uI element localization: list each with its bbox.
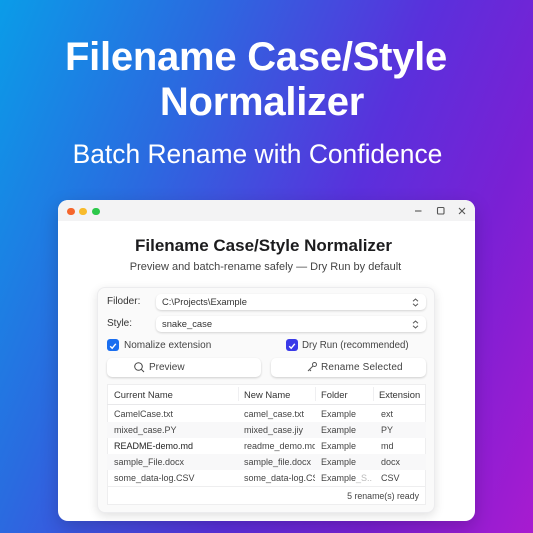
row 4: sample_file.docx — [244, 457, 311, 467]
row 1: CamelCase.txt — [114, 409, 173, 419]
title: Filename Case/Style — [65, 35, 447, 79]
window subheading: Preview and batch-rename safely — Dry Run by default — [130, 261, 401, 273]
button: preview — [107, 358, 261, 377]
row 2: mixed_case.PY — [114, 425, 177, 435]
label: dry run: Dry Run (recommended) — [302, 340, 409, 351]
row 1: Example — [321, 409, 356, 419]
row 3 — [114, 441, 394, 452]
row 4: docx — [381, 457, 400, 467]
title — [65, 35, 447, 124]
table header: Current Name — [114, 389, 173, 400]
row 4: sample_File.docx — [114, 457, 184, 467]
subtitle: Batch Rename with Confidence — [73, 139, 442, 169]
row 1 — [114, 409, 393, 420]
row 3: Example — [321, 441, 356, 451]
row 4 — [107, 454, 426, 470]
field: folder path: C:\Projects\Example — [162, 296, 247, 307]
row 2: PY — [381, 425, 393, 435]
table — [107, 384, 426, 505]
row 5 — [114, 473, 400, 484]
title bar — [58, 200, 475, 221]
row 1: camel_case.txt — [244, 409, 304, 419]
row 2: mixed_case.jiy — [244, 425, 303, 435]
panel: settings card — [97, 287, 435, 513]
icon: minimize dot — [79, 208, 86, 215]
field: folder path — [156, 294, 426, 310]
title: Normalizer — [160, 80, 364, 124]
row 5: CSV — [381, 473, 400, 483]
window heading: Filename Case/Style Normalizer — [135, 236, 392, 255]
row 1: ext — [381, 409, 393, 419]
icon: close dot — [67, 208, 74, 215]
rename label: Rename Selected — [321, 362, 403, 373]
table header — [107, 384, 426, 405]
app window — [58, 200, 475, 521]
checkbox: normalize extension — [107, 339, 119, 351]
table header: Folder — [321, 389, 348, 400]
row 2 — [107, 422, 426, 438]
checkbox: dry run — [286, 339, 298, 351]
table header: Extension — [379, 389, 420, 400]
row 4: Example — [321, 457, 356, 467]
row 3: README-demo.md — [114, 441, 193, 451]
row 5: Example_S.. — [321, 473, 372, 483]
icon: magnifier — [134, 362, 144, 372]
icon: zoom dot — [92, 208, 100, 215]
status text — [107, 486, 426, 505]
icon: wrench — [308, 362, 317, 372]
icon: window controls — [415, 207, 466, 214]
table header: New Name — [244, 389, 290, 400]
field: style: snake_case — [162, 318, 212, 329]
row 2: Example — [321, 425, 356, 435]
label: style: Style: — [107, 318, 132, 329]
row 3: readme_demo.md — [244, 441, 315, 451]
row 3: md — [381, 441, 394, 451]
status text: 5 rename(s) ready — [347, 491, 419, 501]
button: rename selected — [271, 358, 426, 377]
field: style — [156, 316, 426, 332]
label: folder: Filoder: — [107, 296, 140, 307]
label: normalize extension: Nomalize extension — [124, 340, 211, 351]
row 5: some_data-log.CSV — [114, 473, 195, 483]
preview label: Preview — [149, 362, 185, 373]
